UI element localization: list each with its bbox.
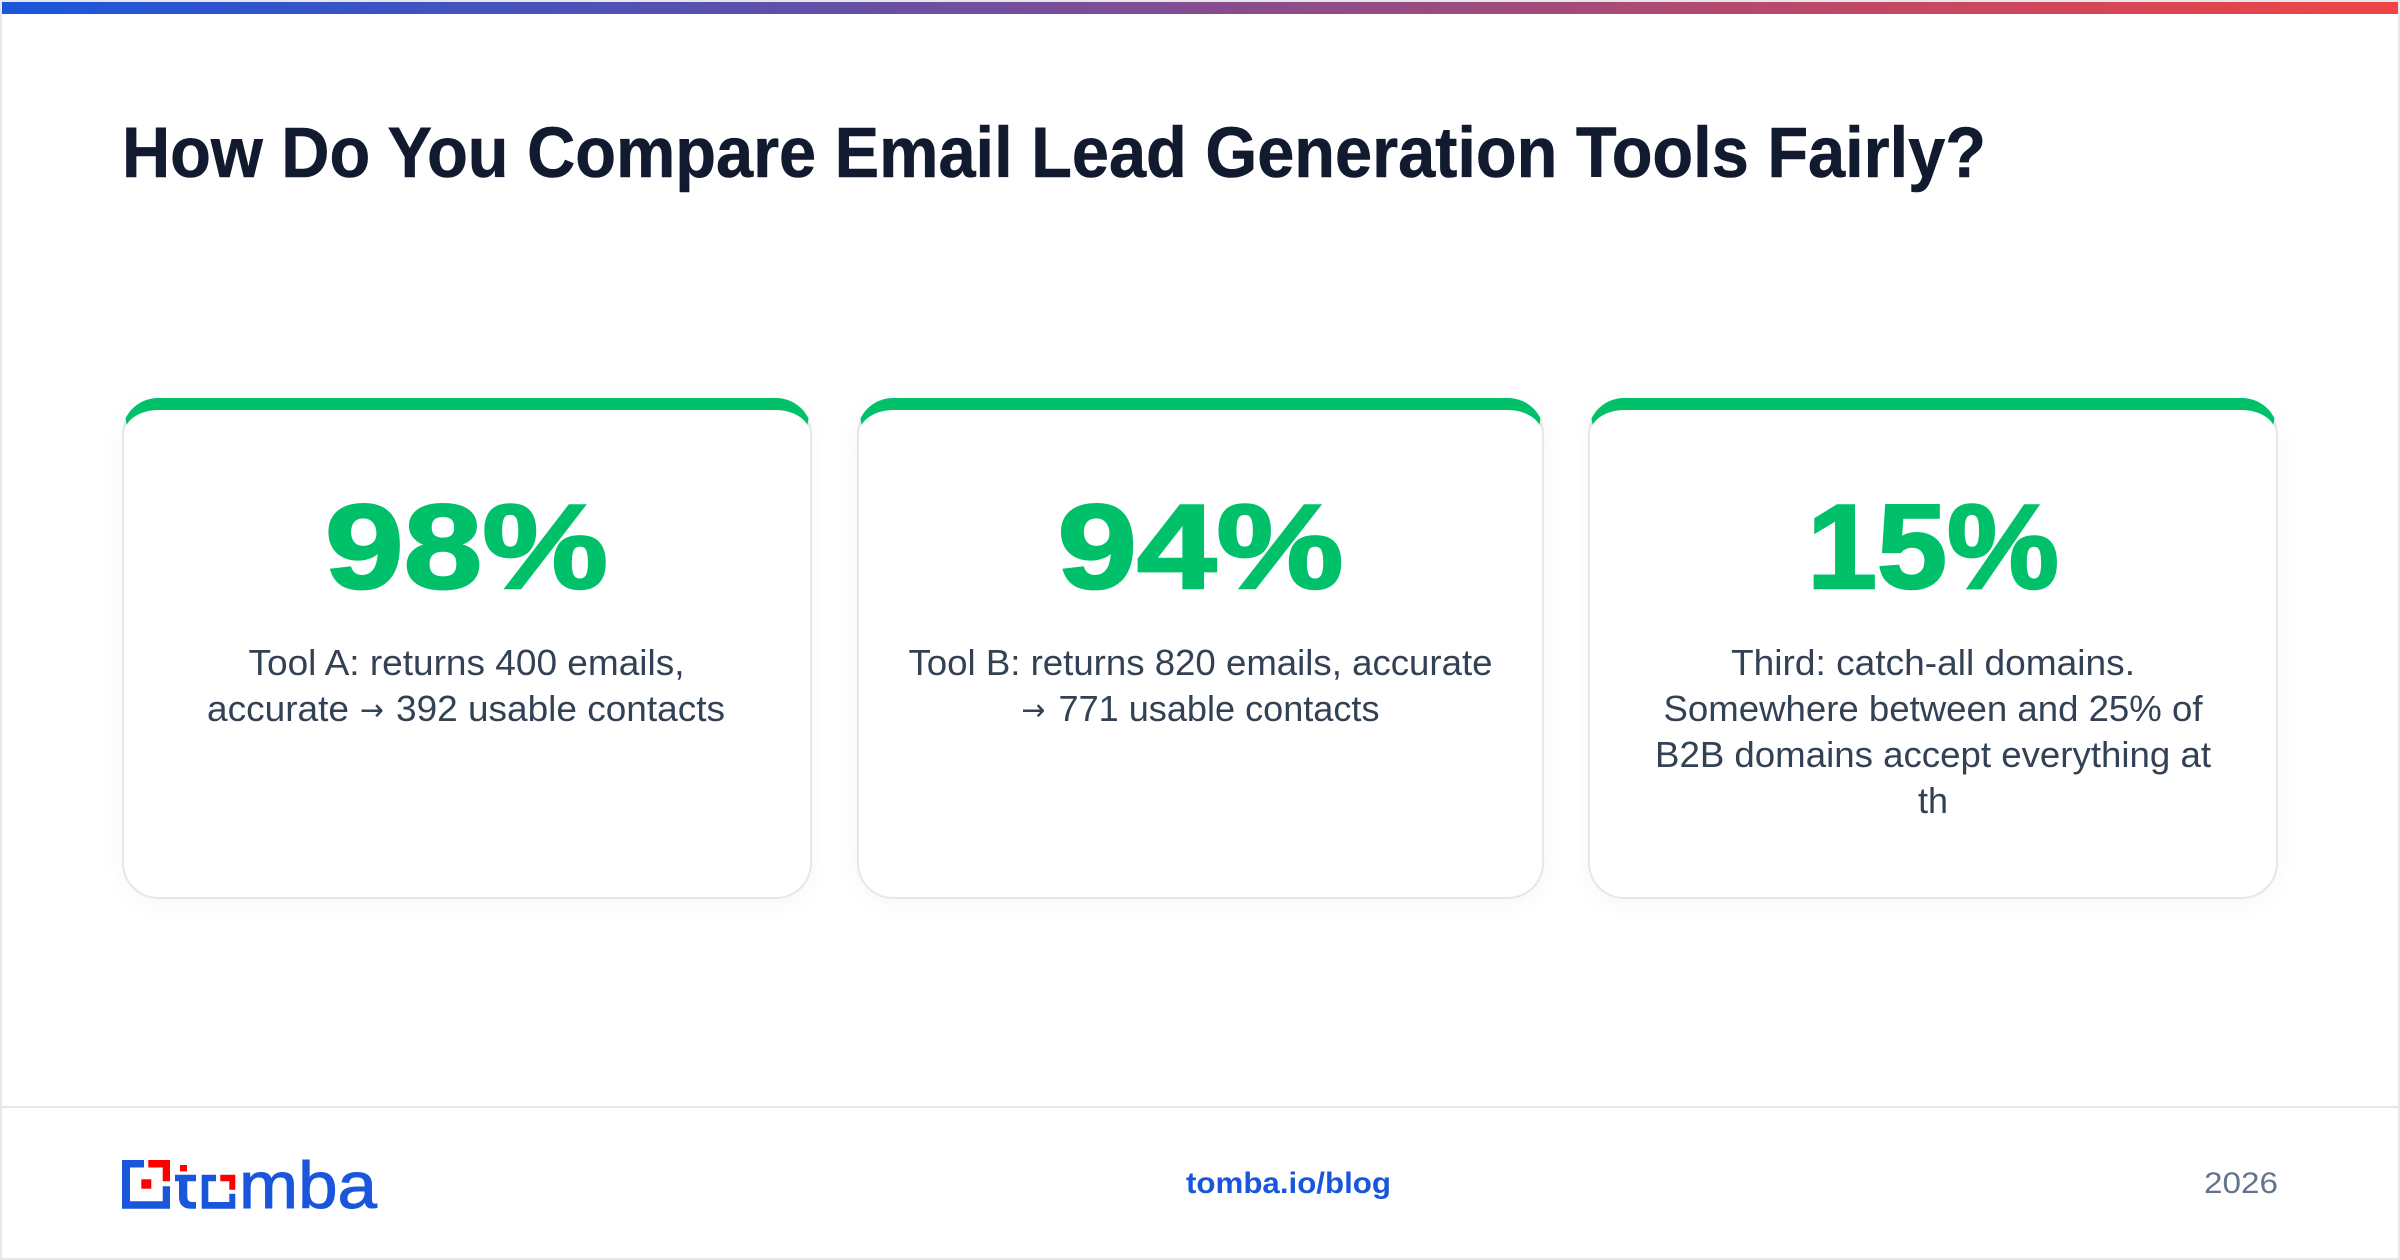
description: Tool B: 771 usable contacts: [1058, 688, 1379, 729]
description: catch-all domains: [1655, 642, 2211, 821]
description: catch-all domains: th: [1918, 780, 1948, 821]
logo: tomba: [122, 1148, 377, 1222]
stat: 15%: 15%: [1807, 480, 2059, 614]
footer: [2, 1106, 2398, 1258]
logo letters: mba: mba: [239, 1148, 377, 1222]
logo letter: t: [175, 1165, 196, 1209]
logo letter: o: [202, 1175, 235, 1209]
description: Tool A: →: [360, 693, 384, 728]
description: Tool A: [207, 642, 725, 729]
stat: 94%: 94%: [1057, 480, 1343, 614]
title: How Do You Compare Email Lead Generation Tools Fairly?: [122, 114, 1986, 193]
description: Tool B: [908, 642, 1492, 729]
panel: Tool A stat card: [122, 398, 812, 899]
description: Tool B: Tool B: returns 820 emails, accurate: [908, 642, 1492, 683]
panel: catch-all domains stat card: [1588, 398, 2278, 899]
description: Tool B: →: [1021, 693, 1045, 728]
description: catch-all domains: B2B domains accept everything at: [1655, 734, 2211, 775]
description: Tool A: 392 usable contacts: [396, 688, 725, 729]
description: catch-all domains: Third: catch-all domains.: [1731, 642, 2135, 683]
icon: tomba square mark: [122, 1160, 170, 1209]
footer link: tomba.io/blog: tomba.io/blog: [1186, 1167, 1391, 1200]
description: Tool A: accurate: [207, 688, 349, 729]
description: Tool A: Tool A: returns 400 emails,: [248, 642, 684, 683]
stat: 98%: 98%: [325, 480, 608, 614]
footer year: 2026: 2026: [2204, 1167, 2278, 1200]
description: catch-all domains: Somewhere between and 25% of: [1664, 688, 2204, 729]
panel: Tool B stat card: [856, 398, 1544, 899]
